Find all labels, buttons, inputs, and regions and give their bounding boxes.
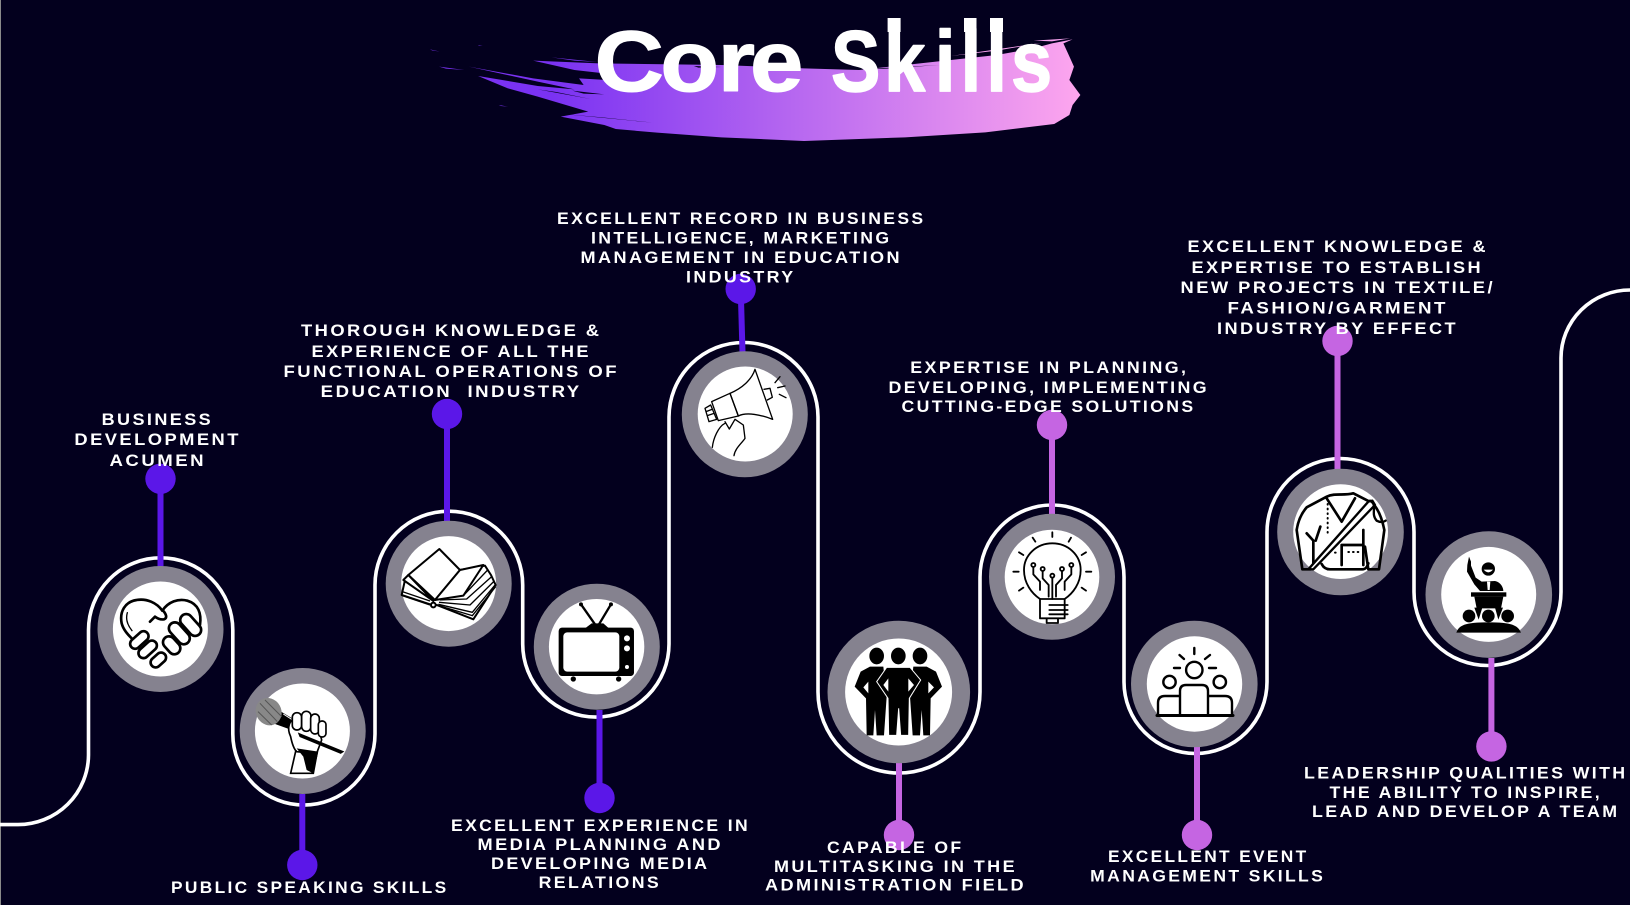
label: media planning: DEVELOPING MEDIA <box>491 855 710 873</box>
label: cutting-edge solutions <box>888 359 1209 416</box>
label: multitasking: ADMINISTRATION FIELD <box>765 877 1026 895</box>
label: event management <box>1090 848 1325 885</box>
label: business intelligence: EXCELLENT RECORD IN BUSINESS <box>557 210 926 228</box>
milestone 2: public speaking <box>240 668 366 880</box>
label: business development acumen: ACUMEN <box>110 452 206 470</box>
milestone 6: multitasking <box>828 621 970 850</box>
milestone 10: leadership <box>1426 531 1552 762</box>
label: leadership qualities: LEADERSHIP QUALITIES WITH <box>1304 764 1628 782</box>
label: business intelligence <box>557 210 926 286</box>
title <box>594 13 1052 110</box>
label: business intelligence: MANAGEMENT IN EDUCATION <box>580 249 902 267</box>
label: thorough knowledge: FUNCTIONAL OPERATIONS OF <box>284 363 619 381</box>
label: event management: EXCELLENT EVENT <box>1108 848 1308 866</box>
icon: open book <box>402 549 496 619</box>
icon: speaker at podium with audience <box>1456 557 1521 633</box>
label: thorough knowledge: EDUCATION INDUSTRY <box>321 383 582 401</box>
label: textile projects <box>1180 238 1495 338</box>
icon: three businessmen <box>855 648 942 735</box>
milestone 5: marketing <box>682 274 808 477</box>
milestone 4: media planning <box>534 584 660 813</box>
label: public speaking skills: PUBLIC SPEAKING SKILLS <box>171 879 448 897</box>
label: business development acumen: DEVELOPMENT <box>74 431 241 449</box>
icon: heart handshake <box>121 600 204 670</box>
icon: megaphone in hand <box>705 369 786 456</box>
icon: light bulb with circuit <box>1013 532 1091 623</box>
milestone 9: textile and fashion <box>1277 326 1404 595</box>
label: textile projects: NEW PROJECTS IN TEXTILE/ <box>1180 279 1495 297</box>
label: cutting-edge solutions: DEVELOPING, IMPLEMENTING <box>888 379 1209 397</box>
label: multitasking <box>765 839 1026 895</box>
winding white roadmap path <box>0 290 1630 825</box>
label: thorough knowledge <box>284 322 619 401</box>
label: business intelligence: INTELLIGENCE, MARKETING <box>591 230 892 248</box>
label: leadership qualities <box>1304 764 1628 821</box>
label: thorough knowledge: THOROUGH KNOWLEDGE & <box>301 322 602 340</box>
label: media planning: EXCELLENT EXPERIENCE IN <box>451 817 750 835</box>
milestone 1: business development <box>98 464 224 692</box>
label: textile projects: EXCELLENT KNOWLEDGE & <box>1188 238 1488 256</box>
label: leadership qualities: LEAD AND DEVELOP A TEAM <box>1312 803 1620 821</box>
label: cutting-edge solutions: CUTTING-EDGE SOLUTIONS <box>902 398 1196 416</box>
label: cutting-edge solutions: EXPERTISE IN PLANNING, <box>910 359 1188 377</box>
label: textile projects: FASHION/GARMENT <box>1228 300 1448 318</box>
label: business intelligence: INDUSTRY <box>686 268 796 286</box>
icon: television <box>559 602 634 682</box>
label: media planning: MEDIA PLANNING AND <box>478 836 723 854</box>
label: thorough knowledge: EXPERIENCE OF ALL THE <box>312 343 591 361</box>
title: Skills <box>831 13 1052 109</box>
label: media planning: RELATIONS <box>539 874 661 892</box>
label: textile projects: INDUSTRY BY EFFECT <box>1217 320 1458 338</box>
label: leadership qualities: THE ABILITY TO INSPIRE, <box>1330 784 1602 802</box>
milestone 3: education knowledge <box>386 399 512 647</box>
icon: jacket with needle <box>1297 493 1386 569</box>
icon: team of people <box>1157 648 1233 716</box>
label: business development acumen <box>74 411 241 470</box>
label: business development acumen: BUSINESS <box>102 411 213 429</box>
title: Core <box>594 14 803 110</box>
label: event management: MANAGEMENT SKILLS <box>1090 867 1325 885</box>
milestone 8: event management <box>1131 621 1258 850</box>
icon: hand holding microphone <box>251 693 343 773</box>
milestone 7: cutting-edge solutions <box>989 410 1115 640</box>
label: multitasking: CAPABLE OF <box>827 839 964 857</box>
label: media planning <box>451 817 750 892</box>
label: multitasking: MULTITASKING IN THE <box>774 858 1017 876</box>
label: textile projects: EXPERTISE TO ESTABLISH <box>1192 259 1483 277</box>
brush stroke behind title <box>430 38 1080 141</box>
